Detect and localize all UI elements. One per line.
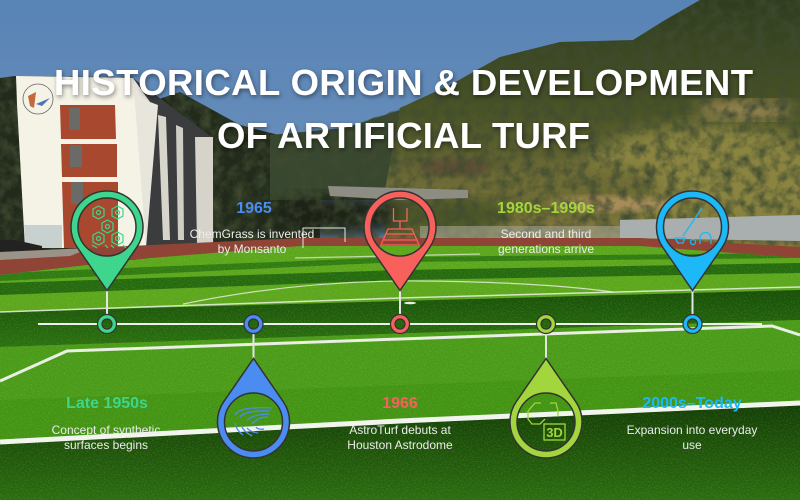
- description: ChemGrass is invented: [190, 227, 314, 241]
- title: [54, 62, 753, 156]
- milestone: 1966: [347, 191, 453, 452]
- pin: [364, 191, 436, 290]
- description: Second and third: [501, 227, 591, 241]
- connector: [399, 290, 401, 315]
- node: [244, 314, 263, 334]
- icon: turf wave: [235, 408, 272, 436]
- description: Expansion into everyday: [627, 423, 757, 437]
- node: [98, 314, 116, 334]
- year: 1966: [382, 395, 418, 412]
- year: 1980s–1990s: [497, 200, 595, 217]
- node: [536, 314, 556, 334]
- description: Houston Astrodome: [347, 438, 453, 452]
- description: generations arrive: [498, 242, 594, 256]
- connector: [106, 290, 108, 315]
- dark forest left: [0, 76, 320, 260]
- icon: 3D glasses: 3D: [546, 425, 563, 440]
- icon: club and ball: [675, 208, 711, 244]
- pin: [510, 358, 582, 458]
- year: 2000s–Today: [642, 395, 742, 412]
- title: HISTORICAL ORIGIN & DEVELOPMENT: [54, 62, 753, 103]
- description: use: [682, 438, 702, 452]
- building logo: [23, 84, 53, 114]
- icon: goal and field: [381, 208, 419, 245]
- goal: [303, 228, 345, 248]
- title: OF ARTIFICIAL TURF: [217, 115, 590, 156]
- right mountain: [385, 0, 800, 250]
- track: [0, 238, 800, 275]
- connector: [692, 290, 694, 315]
- field: [0, 240, 800, 500]
- milestone: 1980s–1990s: [497, 200, 595, 458]
- connector: [252, 333, 254, 360]
- milestone: 2000s–Today: [627, 191, 757, 452]
- icon: hex nodes: [92, 206, 126, 248]
- icon: 3D glasses: [528, 403, 565, 440]
- field lines: [0, 254, 800, 442]
- building front: [16, 76, 146, 248]
- pin: [71, 191, 143, 290]
- milestone: 1965: [190, 200, 314, 458]
- field stripes: [0, 253, 800, 281]
- connector: [545, 333, 547, 360]
- description: AstroTurf debuts at: [349, 423, 451, 437]
- description: [347, 423, 453, 452]
- fence: [620, 215, 800, 241]
- description: [627, 423, 757, 452]
- pin: [656, 191, 728, 290]
- forest texture: [0, 0, 800, 250]
- node: [683, 314, 702, 334]
- year: 1965: [236, 200, 272, 217]
- pin: [218, 358, 290, 458]
- timeline line: [38, 323, 762, 325]
- description: by Monsanto: [218, 242, 287, 256]
- description: [52, 423, 160, 452]
- description: Concept of synthetic: [52, 423, 160, 437]
- description: [498, 227, 594, 256]
- grey rock wall: [328, 186, 468, 200]
- distant hills: [270, 110, 430, 200]
- node: [390, 314, 410, 334]
- description: surfaces begins: [64, 438, 148, 452]
- milestone: Late 1950s: [52, 191, 160, 452]
- description: [190, 227, 314, 256]
- building side wing: [133, 78, 214, 248]
- year: Late 1950s: [66, 395, 148, 412]
